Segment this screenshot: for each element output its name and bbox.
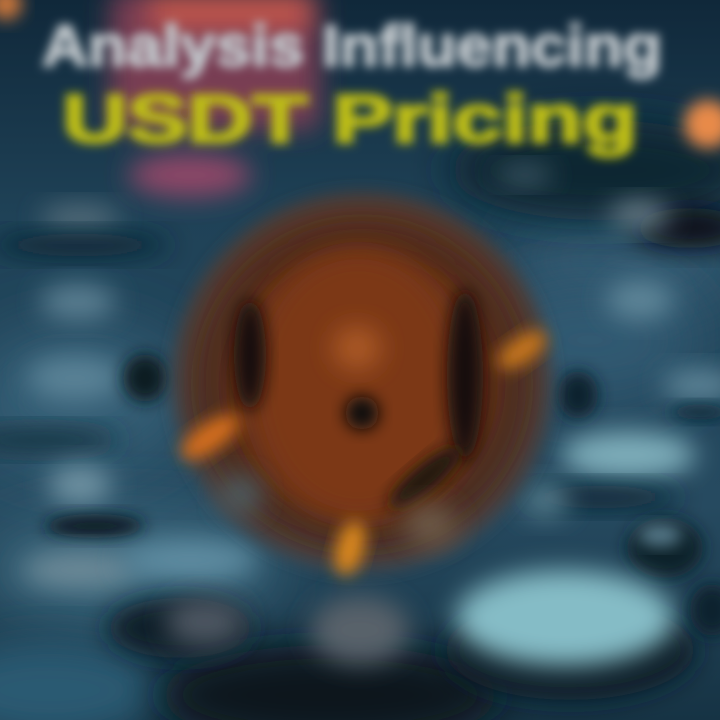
- coin dark lower groove: [381, 438, 469, 518]
- pink title backdrop: [110, 0, 320, 197]
- orange glint right: [492, 323, 552, 377]
- coin inner ring shadow: [212, 235, 512, 535]
- coin dark right groove: [447, 290, 483, 460]
- lower right grey patch: [404, 505, 456, 545]
- title: [42, 14, 662, 157]
- title: USDT Pricing: [62, 81, 638, 157]
- decorative orange orbs: [0, 0, 720, 148]
- coin centre hole: [345, 396, 379, 430]
- coin inner face: [250, 250, 466, 520]
- orange glint bottom: [329, 517, 371, 579]
- central coin: [172, 192, 552, 579]
- lower left grey patch: [218, 475, 262, 515]
- title: Analysis Influencing: [42, 14, 662, 79]
- orange glint left: [174, 406, 246, 468]
- background coins: [0, 165, 720, 700]
- coin dark left groove: [234, 300, 266, 410]
- coin highlight: [333, 326, 381, 370]
